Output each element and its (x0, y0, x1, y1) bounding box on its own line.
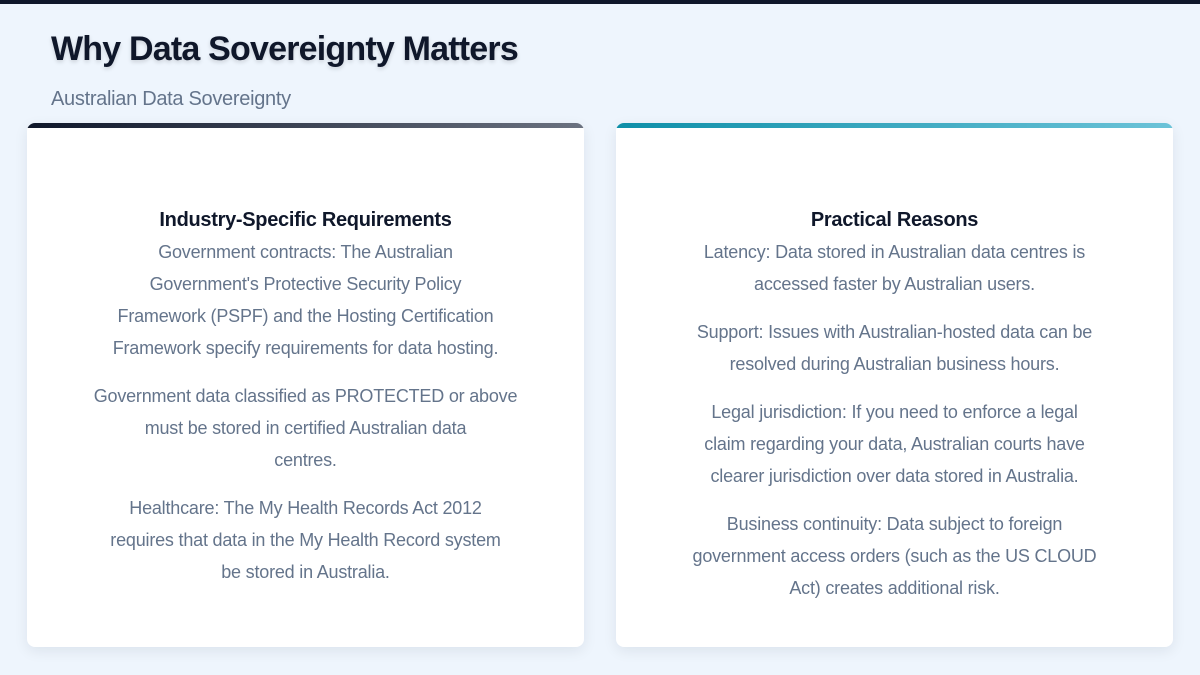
text: protected data: must be stored in certified Australian data (145, 418, 466, 438)
text: business continuity: Business continuity: Data subject to foreign (727, 514, 1062, 534)
text: support (697, 322, 1092, 374)
text: government contracts (113, 242, 498, 358)
text: government contracts: Government contracts: The Australian (158, 242, 453, 262)
title: Why Data Sovereignty Matters (51, 30, 518, 68)
heading: industry-specific requirements: Industry-Specific Requirements (159, 209, 452, 231)
text: legal jurisdiction: clearer jurisdiction over data stored in Australia. (710, 466, 1078, 486)
text: legal jurisdiction (704, 402, 1085, 486)
text: healthcare: requires that data in the My Health Record system (110, 530, 501, 550)
text: protected data (94, 386, 517, 470)
panel: practical reasons (616, 123, 1173, 647)
text: legal jurisdiction: Legal jurisdiction: If you need to enforce a legal (711, 402, 1078, 422)
text: latency: accessed faster by Australian users. (754, 274, 1035, 294)
text: protected data: Government data classified as PROTECTED or above (94, 386, 517, 406)
text: government contracts: Framework specify requirements for data hosting. (113, 338, 498, 358)
text: government contracts: Framework (PSPF) and the Hosting Certification (118, 306, 493, 326)
text: support: resolved during Australian business hours. (730, 354, 1059, 374)
text: healthcare: Healthcare: The My Health Records Act 2012 (129, 498, 482, 518)
subtitle: Australian Data Sovereignty (51, 88, 291, 110)
text: business continuity: Act) creates additional risk. (789, 578, 1000, 598)
text: business continuity (693, 514, 1096, 598)
text: government contracts: Government's Protective Security Policy (150, 274, 461, 294)
text: business continuity: government access orders (such as the US CLOUD (693, 546, 1096, 566)
panel: industry-specific requirements (27, 123, 584, 647)
text: healthcare: be stored in Australia. (221, 562, 390, 582)
text: healthcare (110, 498, 501, 582)
text: legal jurisdiction: claim regarding your data, Australian courts have (704, 434, 1085, 454)
heading: practical reasons: Practical Reasons (811, 209, 978, 231)
text: protected data: centres. (274, 450, 337, 470)
text: latency: Latency: Data stored in Australian data centres is (704, 242, 1085, 262)
text: latency (704, 242, 1085, 294)
text: support: Support: Issues with Australian-hosted data can be (697, 322, 1092, 342)
